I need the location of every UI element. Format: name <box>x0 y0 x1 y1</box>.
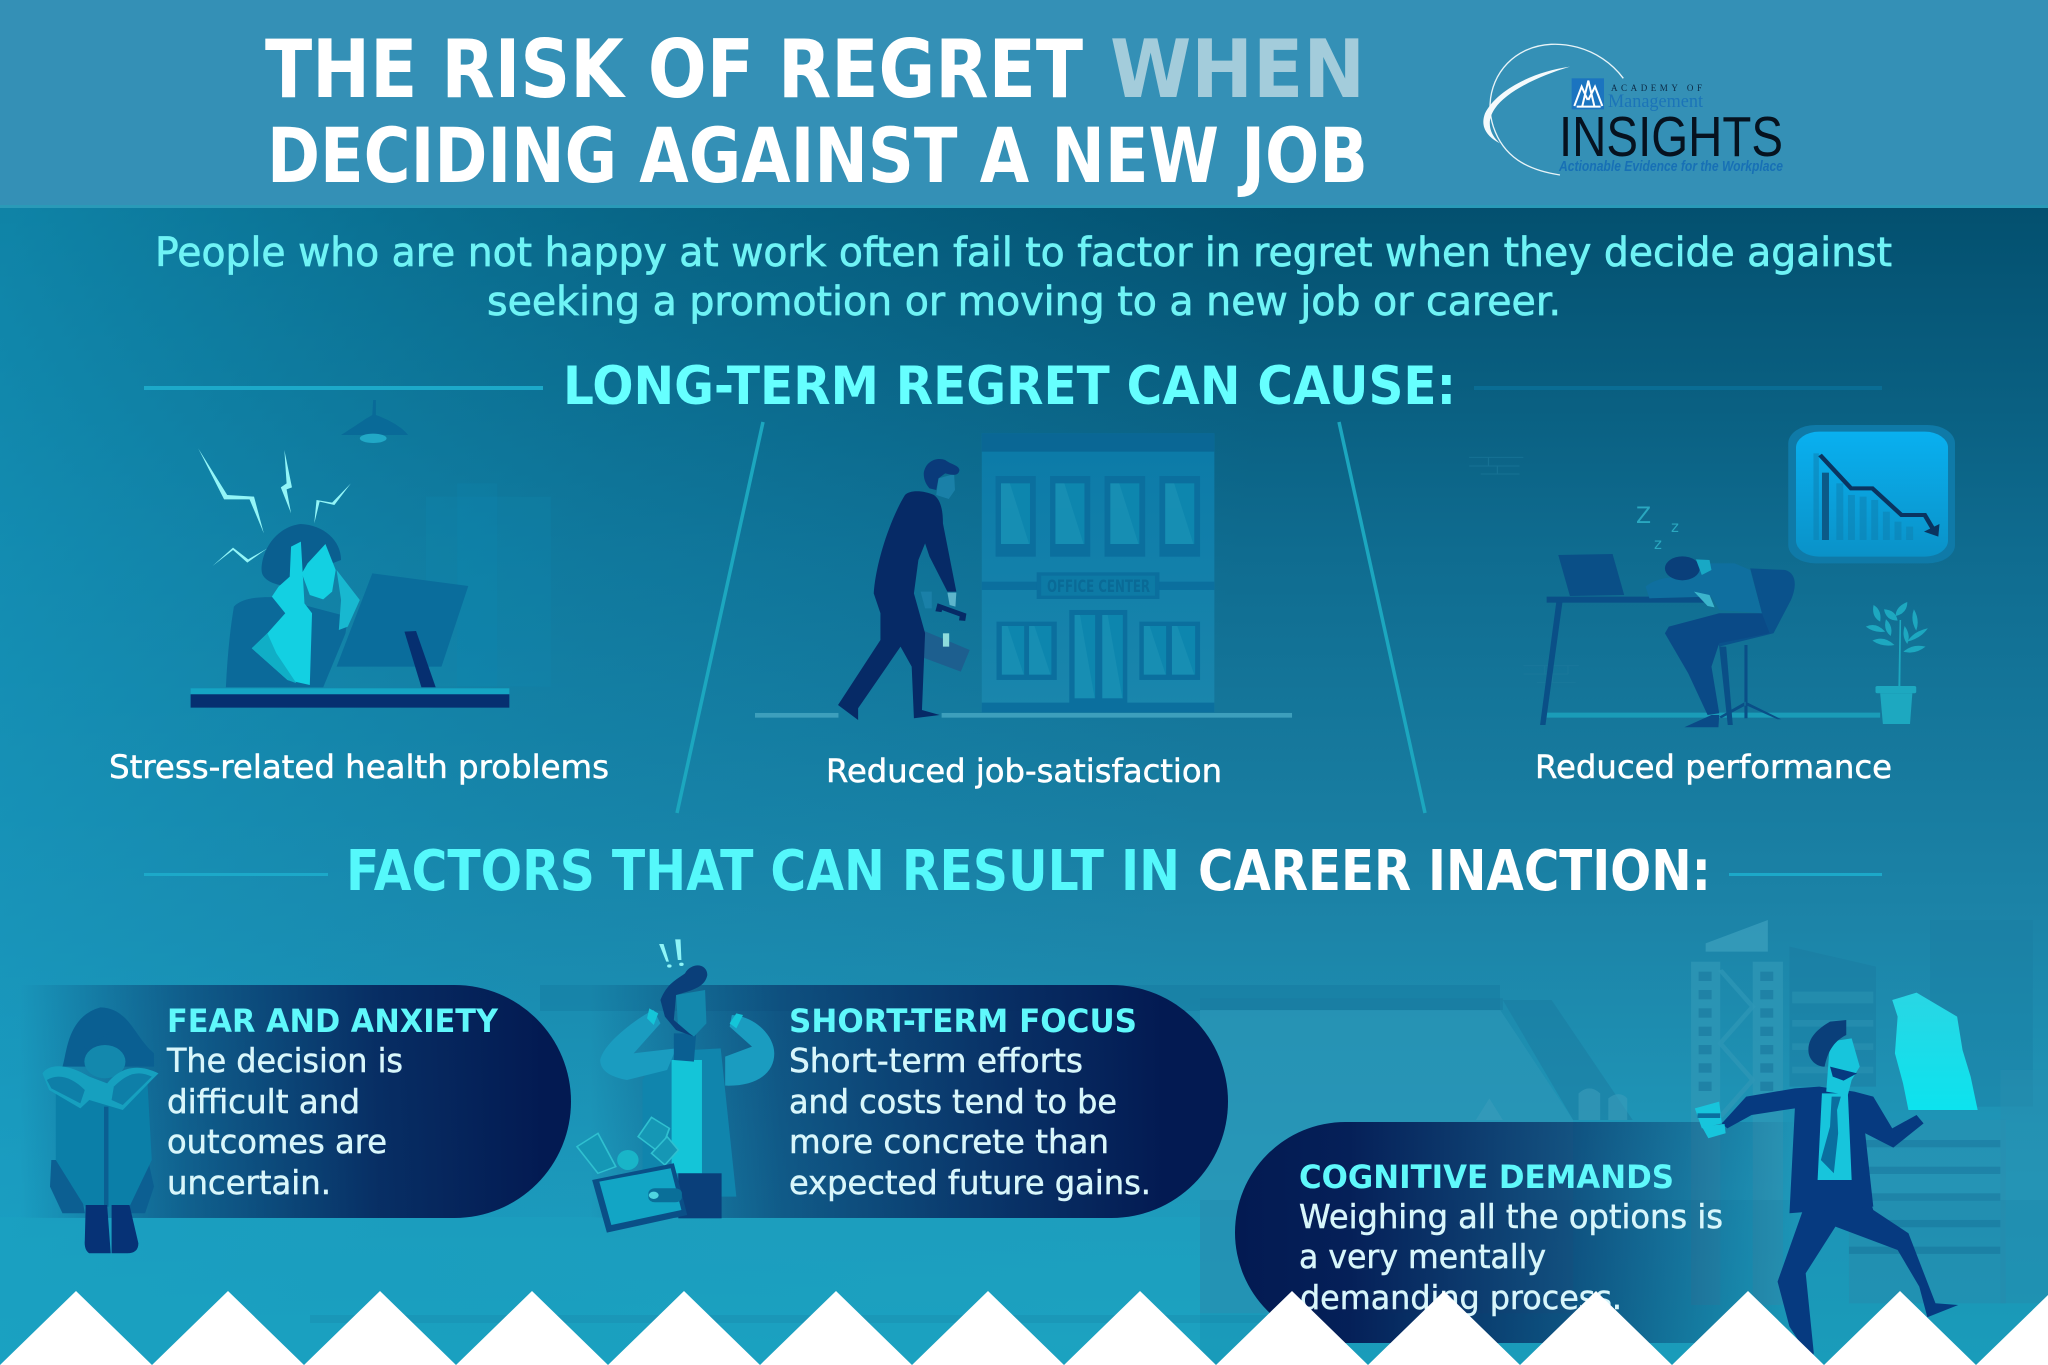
panel: reduced performance <box>1469 425 1955 786</box>
logo: Academy of Management Insights: INSIGHTS <box>1559 105 1783 169</box>
pill text: cognitive demands: a very mentally <box>1299 1237 1546 1276</box>
title: THE RISK OF REGRET <box>265 23 1083 116</box>
heading: factors: CAREER INACTION: <box>1198 839 1711 904</box>
figure: man with wallet holding his head <box>577 939 774 1233</box>
pill text: short-term focus: Short-term efforts <box>789 1041 1083 1080</box>
title: WHEN <box>1110 23 1365 116</box>
panel: stress-related health problems <box>109 400 609 786</box>
building sign: OFFICE CENTER <box>1047 577 1150 597</box>
header band <box>0 0 2048 208</box>
pill text: cognitive demands: Weighing all the options is <box>1299 1197 1723 1236</box>
intro text: seeking a promotion or moving to a new job or career. <box>487 279 1561 325</box>
figure: man running with paper stack and coffee <box>1695 993 1978 1360</box>
background city scene <box>0 920 2048 1365</box>
panel: reduced job-satisfaction <box>755 433 1292 790</box>
heading: factors <box>144 839 1882 904</box>
intro text <box>155 230 1892 325</box>
heading: factors: FACTORS THAT CAN RESULT IN <box>346 839 1180 904</box>
caption: Reduced performance <box>1535 748 1892 786</box>
figure: woman hugging knees <box>42 1007 158 1253</box>
sleep letters: z <box>1654 535 1662 553</box>
panel dividers <box>677 422 1425 813</box>
zigzag white bottom edge <box>0 1291 2048 1365</box>
pill text: fear and anxiety: difficult and <box>167 1082 360 1121</box>
pill text: fear and anxiety: FEAR AND ANXIETY <box>167 1002 499 1040</box>
illustration: man leaving office building <box>755 433 1292 720</box>
sleep letters <box>1636 504 1679 553</box>
illustration: man asleep at desk with falling chart <box>1469 425 1955 727</box>
pill text: short-term focus <box>789 1002 1151 1202</box>
callout pill: short-term focus <box>590 985 1228 1218</box>
pill text: fear and anxiety <box>166 1002 499 1202</box>
sleep letters: Z <box>1636 504 1651 529</box>
pill text: fear and anxiety: outcomes are <box>167 1122 387 1161</box>
intro text: People who are not happy at work often fail to factor in regret when they decide against <box>155 230 1892 276</box>
pill text: cognitive demands: demanding process. <box>1300 1278 1622 1317</box>
pill text: cognitive demands: COGNITIVE DEMANDS <box>1299 1158 1674 1196</box>
logo: Academy of Management Insights <box>1483 44 1783 175</box>
logo: Academy of Management Insights: Actionable Evidence for the Workplace <box>1558 158 1783 175</box>
callout pill: fear and anxiety <box>0 985 571 1218</box>
pill text: fear and anxiety: uncertain. <box>167 1163 331 1202</box>
logo: Academy of Management Insights: Management <box>1608 91 1704 112</box>
pill text: short-term focus: more concrete than <box>789 1122 1109 1161</box>
heading: long-term regret <box>144 356 1882 417</box>
heading: long-term regret: LONG-TERM REGRET CAN CAUSE: <box>563 356 1456 417</box>
pill text: cognitive demands <box>1299 1158 1723 1317</box>
pill text: short-term focus: and costs tend to be <box>789 1082 1117 1121</box>
pill text: short-term focus: expected future gains. <box>789 1163 1151 1202</box>
logo: Academy of Management Insights: ACADEMY OF <box>1611 83 1702 93</box>
logo swoosh <box>1483 44 1623 175</box>
sleep letters: z <box>1671 518 1679 536</box>
pill text: short-term focus: SHORT-TERM FOCUS <box>789 1002 1137 1040</box>
caption: Stress-related health problems <box>109 748 609 786</box>
title <box>265 23 1368 200</box>
callout pill: cognitive demands <box>1235 1122 1800 1343</box>
pill text: fear and anxiety: The decision is <box>166 1041 403 1080</box>
title: DECIDING AGAINST A NEW JOB <box>267 111 1368 200</box>
caption: Reduced job-satisfaction <box>826 752 1222 790</box>
illustration: stressed woman at desk <box>191 400 551 708</box>
